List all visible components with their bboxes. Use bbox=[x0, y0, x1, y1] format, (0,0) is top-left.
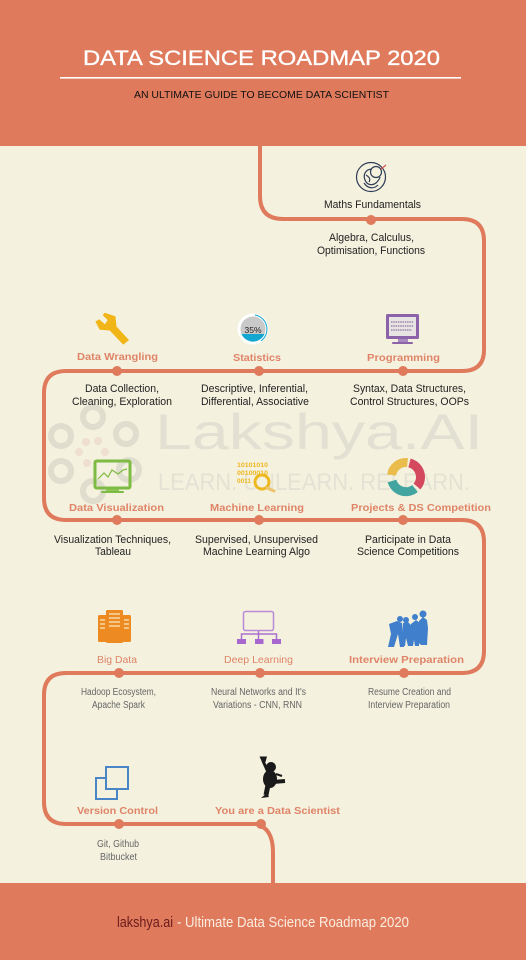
watermark: Lakshya.AI: LEARN. UNLEARN. RELEARN. bbox=[158, 469, 470, 496]
step: Deep Learning: Variations - CNN, RNN bbox=[213, 700, 302, 711]
step: Statistics bbox=[201, 314, 309, 408]
step: Statistics: Differential, Associative bbox=[201, 396, 309, 408]
step: Big Data: Hadoop Ecosystem, bbox=[81, 687, 156, 698]
step: Maths Fundamentals: Algebra, Calculus, bbox=[329, 232, 414, 244]
step: Version Control: Version Control bbox=[77, 805, 158, 817]
step: Data Wrangling bbox=[72, 313, 172, 408]
title: DATA SCIENCE ROADMAP 2020 bbox=[83, 47, 440, 70]
step: Statistics: Descriptive, Inferential, bbox=[201, 383, 308, 395]
step: Big Data bbox=[81, 610, 156, 711]
step: Data Wrangling: Data Collection, bbox=[85, 383, 159, 395]
step: You are a Data Scientist bbox=[215, 756, 341, 829]
step: Big Data: Apache Spark bbox=[92, 700, 146, 711]
step: Programming bbox=[350, 314, 469, 408]
icon: wrench bbox=[96, 313, 128, 344]
icon: 35% gauge: 35% bbox=[244, 325, 262, 335]
step: Machine Learning bbox=[195, 463, 318, 558]
icon: overlapping squares bbox=[96, 767, 128, 799]
step: Projects and DS Competition: Projects & DS Competition bbox=[351, 502, 491, 514]
icon: server racks bbox=[98, 610, 131, 643]
step: Version Control: Bitbucket bbox=[100, 852, 137, 863]
icon: purple monitor bbox=[386, 314, 419, 344]
step: Data Visualization: Tableau bbox=[95, 546, 131, 558]
step: Big Data: Big Data bbox=[97, 654, 137, 666]
step: Machine Learning: Supervised, Unsupervised bbox=[195, 534, 318, 546]
step: Data Visualization: Data Visualization bbox=[69, 502, 164, 514]
icon: circular arrows bbox=[392, 463, 420, 492]
icon: network hierarchy bbox=[237, 612, 281, 644]
step: Deep Learning bbox=[211, 612, 306, 711]
step: Maths Fundamentals: Maths Fundamentals bbox=[324, 199, 421, 211]
step: Version Control: Git, Github bbox=[97, 839, 139, 850]
icon: binary magnifier: 00100010 bbox=[237, 471, 269, 477]
step: Machine Learning: Machine Learning bbox=[210, 502, 304, 514]
header band bbox=[0, 0, 526, 146]
icon: binary magnifier bbox=[237, 463, 274, 491]
icon: embryo in circle bbox=[356, 162, 386, 192]
watermark: Lakshya.AI: Lakshya.AI bbox=[155, 404, 483, 460]
watermark: Lakshya.AI bbox=[51, 404, 483, 501]
icon: green monitor chart bbox=[95, 461, 130, 493]
step: Programming: Syntax, Data Structures, bbox=[353, 383, 466, 395]
subtitle: AN ULTIMATE GUIDE TO BECOME DATA SCIENTIST bbox=[134, 89, 390, 101]
step: Interview Preparation: Interview Preparation bbox=[349, 654, 464, 666]
step: Projects and DS Competition: Participate in Data bbox=[365, 534, 452, 546]
footer brand: lakshya.ai bbox=[117, 914, 173, 931]
step: Programming: Programming bbox=[367, 352, 440, 364]
step: Data Wrangling: Cleaning, Exploration bbox=[72, 396, 172, 408]
icon: binary magnifier: 0011 bbox=[237, 479, 252, 485]
step: Deep Learning: Deep Learning bbox=[224, 654, 293, 666]
step: Machine Learning: Machine Learning Algo bbox=[203, 546, 310, 558]
icon: binary magnifier: 10101010 bbox=[237, 463, 269, 469]
step: Projects and DS Competition bbox=[351, 463, 491, 558]
title underline bbox=[60, 77, 461, 79]
step: Version Control bbox=[77, 767, 158, 863]
icon: celebrating figure silhouette bbox=[260, 756, 285, 798]
step: Interview Preparation: Interview Preparation bbox=[368, 700, 450, 711]
footer band bbox=[0, 883, 526, 960]
step: Interview Preparation bbox=[349, 610, 464, 711]
step: Data Wrangling: Data Wrangling bbox=[77, 351, 158, 363]
step: Statistics: Statistics bbox=[233, 352, 281, 364]
step: Maths Fundamentals: Optimisation, Functions bbox=[317, 245, 425, 257]
step: Projects and DS Competition: Science Competitions bbox=[357, 546, 459, 558]
step: Data Visualization bbox=[54, 461, 171, 558]
roadmap path bbox=[44, 146, 484, 883]
icon: group of people bbox=[388, 610, 428, 647]
step: Programming: Control Structures, OOPs bbox=[350, 396, 469, 408]
step: Interview Preparation: Resume Creation and bbox=[368, 687, 451, 698]
step: You are a Data Scientist: You are a Data Scientist bbox=[215, 805, 341, 817]
step: Maths Fundamentals bbox=[317, 162, 425, 257]
step: Data Visualization: Visualization Techniques, bbox=[54, 534, 171, 546]
footer text: - Ultimate Data Science Roadmap 2020 bbox=[177, 914, 409, 931]
step: Deep Learning: Neural Networks and It's bbox=[211, 687, 306, 698]
